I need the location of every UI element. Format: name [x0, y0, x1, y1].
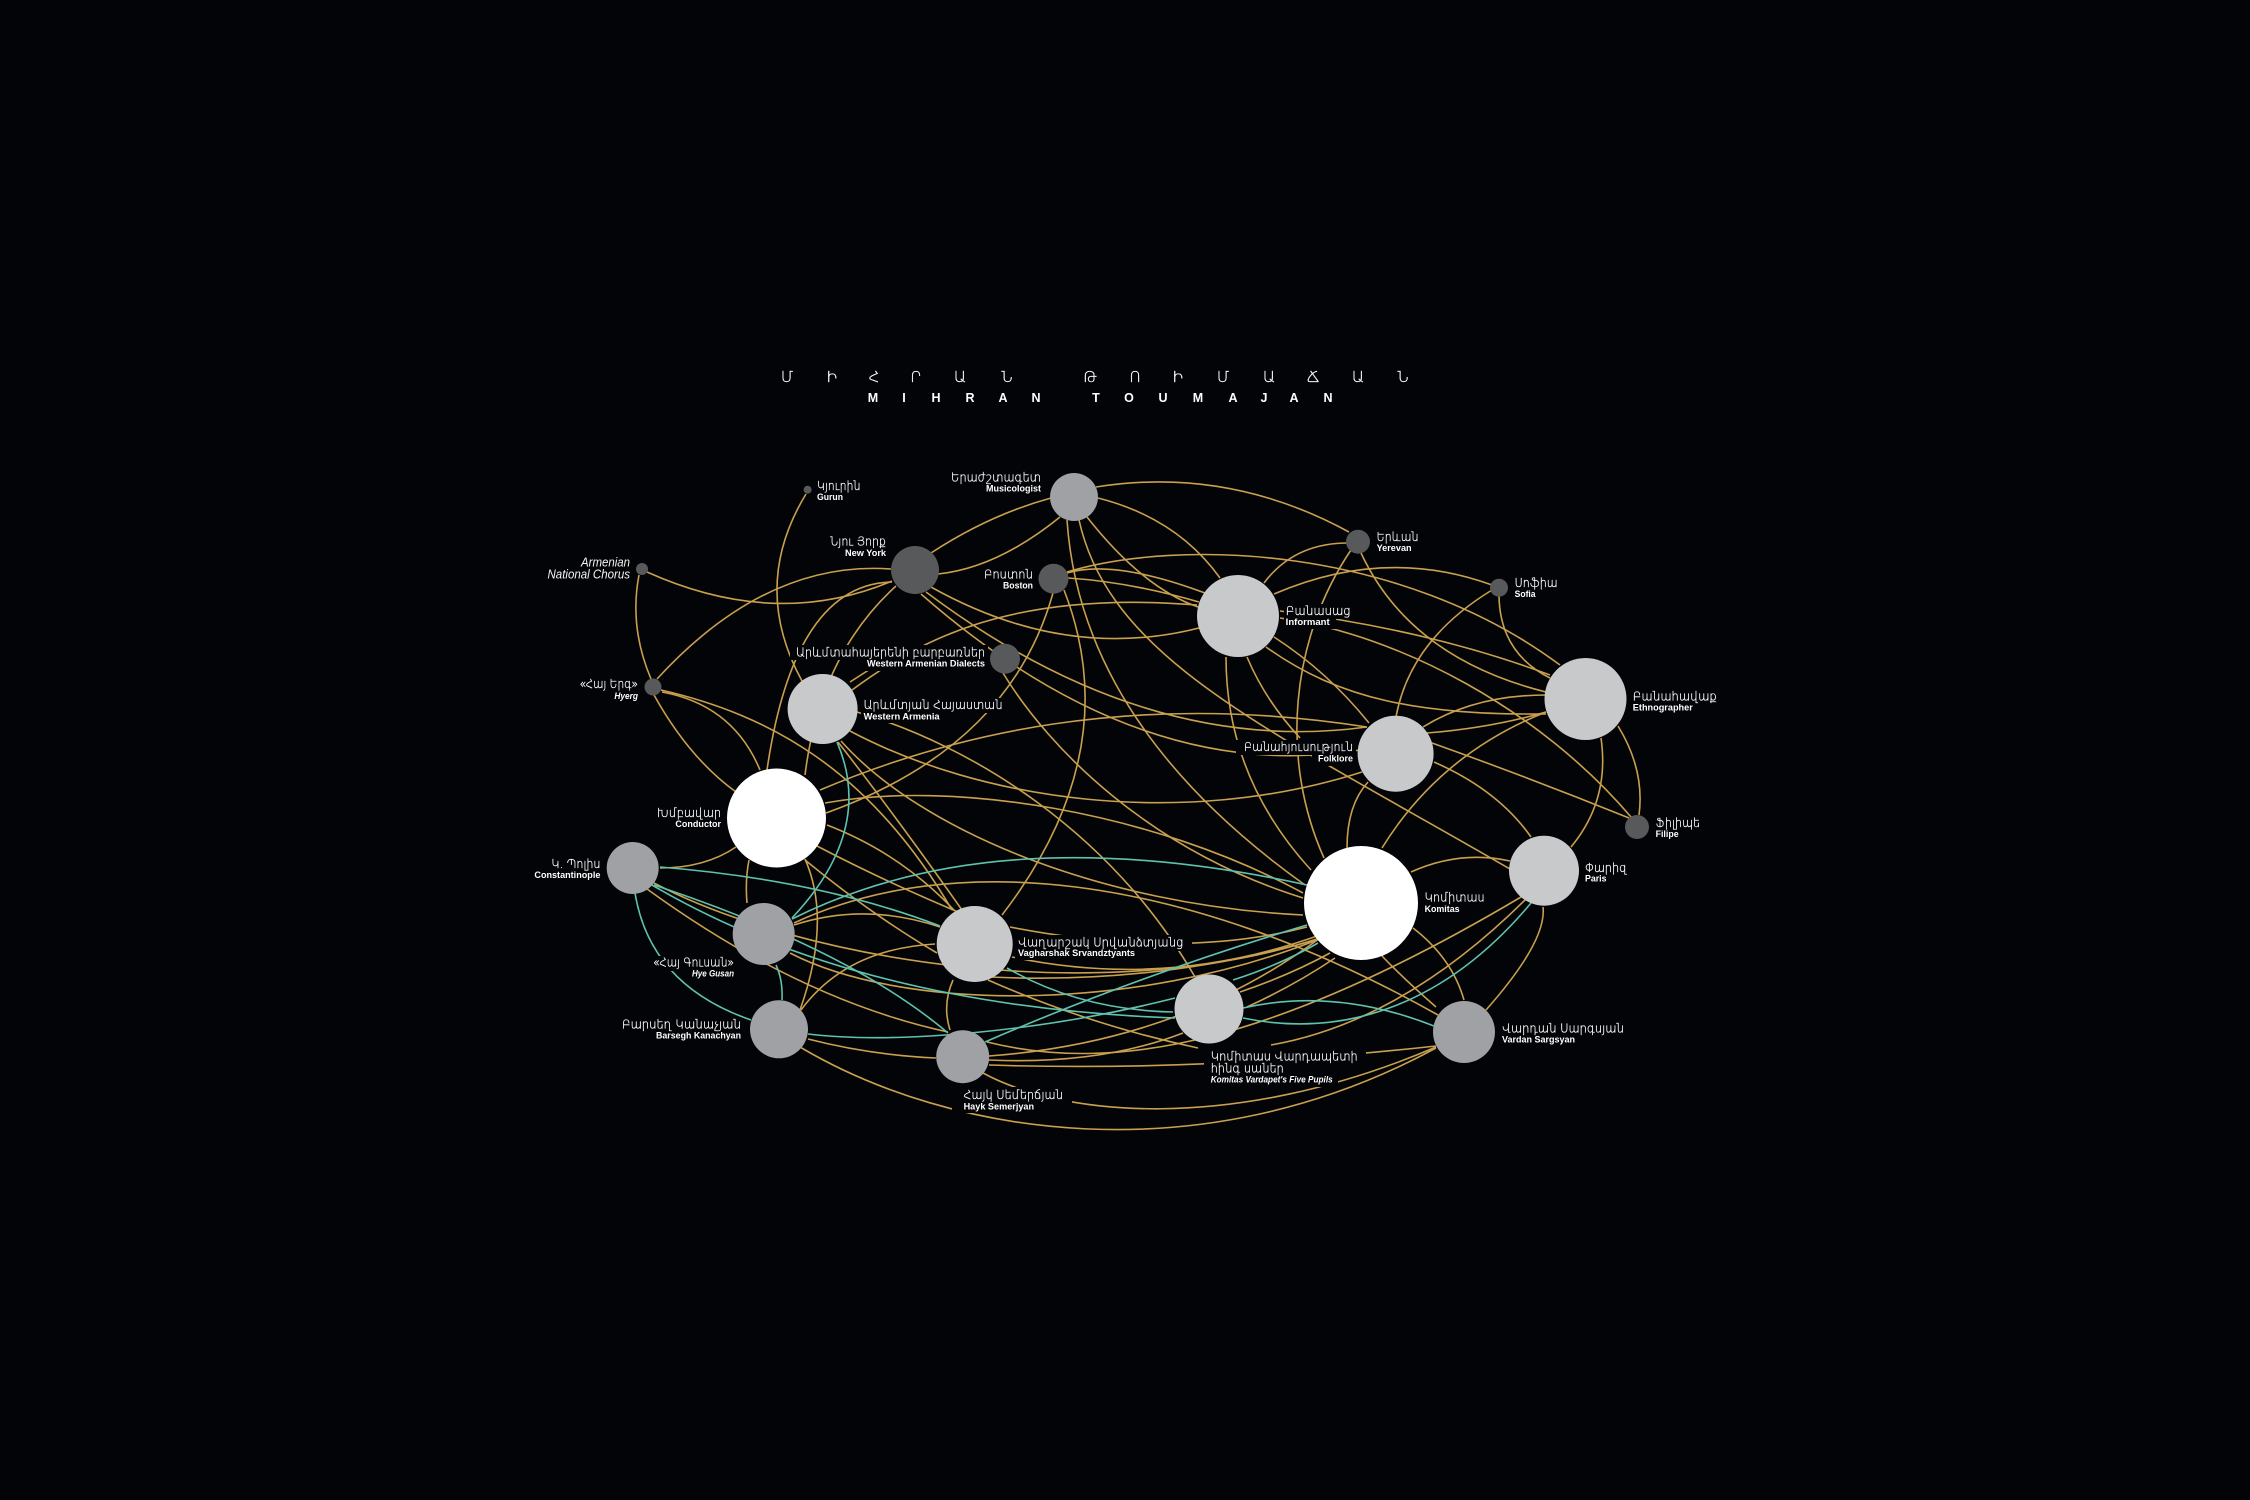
node: Hayk Semerjyan [936, 1030, 989, 1083]
label: Yerevan: Yerevan [1377, 543, 1412, 554]
label: Folklore: Folklore [1318, 754, 1353, 765]
label: Paris: Փարիզ [1585, 860, 1627, 875]
label: Folklore: Բանահյուսություն [1244, 739, 1353, 754]
node: Barsegh Kanachyan [750, 1000, 808, 1058]
label: Vagharshak Srvandztyants: Vagharshak Srvandztyants [1018, 948, 1135, 959]
label: Western Armenian Dialects: Արևմտահայերենի բարբառներ [796, 645, 985, 660]
label: Western Armenia: Արևմտյան Հայաստան [864, 697, 1003, 712]
label: Constantinople [528, 856, 603, 882]
label: Vardan Sargsyan: Վարդան Սարգսյան [1502, 1021, 1624, 1036]
label: Filipe [1653, 815, 1706, 841]
label: Gurun: Կյուրին [817, 478, 860, 493]
node: Informant [1197, 575, 1279, 657]
label: Komitas: Komitas [1425, 904, 1460, 915]
node: Komitas Vardapet's Five Pupils [1174, 974, 1244, 1044]
label: Western Armenian Dialects [790, 645, 988, 671]
label: Komitas Vardapet's Five Pupils: Komitas Vardapet's Five Pupils [1211, 1075, 1333, 1086]
node: Sofia [1490, 579, 1508, 597]
label: Musicologist: Musicologist [986, 484, 1042, 494]
label: Armenian National Chorus [542, 555, 633, 582]
label: Ethnographer: Բանահավաք [1633, 689, 1717, 704]
label: Komitas Vardapet's Five Pupils [1204, 1049, 1366, 1087]
label: Hayk Semerjyan: Hayk Semerjyan [964, 1102, 1034, 1113]
label: Gurun [814, 478, 866, 503]
label: Hyerg [574, 676, 641, 702]
label: Boston: Boston [1003, 581, 1033, 592]
label: Gurun: Gurun [817, 492, 843, 503]
label: New York: Նյու Յորք [830, 534, 886, 549]
label: Barsegh Kanachyan: Բարսեղ Կանաչյան [622, 1017, 741, 1032]
node: Vagharshak Srvandztyants [937, 906, 1013, 982]
label: Musicologist: Երաժշտագետ [951, 470, 1041, 485]
label: Western Armenia: Western Armenia [864, 712, 940, 723]
label: Vagharshak Srvandztyants [1015, 935, 1192, 960]
label: New York: New York [845, 548, 887, 559]
node: Komitas [1304, 846, 1418, 960]
label: Filipe: Filipe [1656, 829, 1679, 840]
label: Informant [1284, 603, 1357, 629]
label: Komitas Vardapet's Five Pupils: Կոմիտաս Վարդապետի [1211, 1049, 1358, 1064]
title: Armenian name: ՄԻՀՐԱՆԹՈԻՄԱՃԱՆ [781, 368, 1409, 386]
node: Hyerg [644, 678, 662, 696]
label: Vardan Sargsyan: Vardan Sargsyan [1502, 1035, 1575, 1046]
node: Filipe [1625, 815, 1649, 839]
label: Yerevan [1374, 529, 1425, 555]
label: Sofia [1512, 575, 1564, 601]
node: New York [891, 546, 939, 594]
node: Western Armenia [788, 674, 858, 744]
network edges: teal links [635, 742, 1531, 1042]
label: Informant: Informant [1286, 617, 1331, 628]
label: Western Armenia [861, 697, 1009, 723]
node: Vardan Sargsyan [1433, 1001, 1495, 1063]
label: Yerevan: Երևան [1377, 529, 1419, 544]
label: Hayk Semerjyan [952, 1087, 1072, 1113]
node: Paris [1509, 836, 1579, 906]
node: Western Armenian Dialects [990, 644, 1020, 674]
label: Filipe: Ֆիլիպե [1656, 815, 1700, 830]
title: Latin name: MIHRANTOUMAJAN [868, 391, 1333, 405]
node: Boston [1038, 564, 1068, 594]
label: Armenian National Chorus: National Chorus [548, 567, 630, 582]
node: Musicologist [1050, 473, 1098, 521]
label: Armenian National Chorus: Armenian [580, 555, 630, 570]
label: Hye Gusan: «Հայ Գուսան» [653, 955, 734, 970]
label: Constantinople: Constantinople [534, 870, 600, 881]
label: Komitas: Կոմիտաս [1425, 890, 1485, 905]
label: Sofia: Սոֆիա [1515, 575, 1558, 590]
node: Folklore [1358, 716, 1434, 792]
label: Komitas [1422, 890, 1491, 916]
node: Ethnographer [1544, 658, 1626, 740]
label: Conductor: Conductor [675, 819, 721, 830]
label: Barsegh Kanachyan [616, 1017, 744, 1043]
node: Hye Gusan [733, 903, 795, 965]
node: Yerevan [1346, 530, 1370, 554]
label: Vardan Sargsyan [1500, 1021, 1631, 1047]
label: Ethnographer [1630, 689, 1723, 715]
label: Boston: Բոստոն [984, 567, 1033, 582]
label: Hye Gusan [647, 955, 737, 981]
label: Boston [978, 567, 1036, 592]
label: Conductor: Խմբավար [657, 805, 721, 820]
node: Conductor [727, 768, 826, 868]
label: Western Armenian Dialects: Western Armenian Dialects [867, 659, 985, 670]
label: Musicologist [945, 470, 1044, 495]
label: Hye Gusan: Hye Gusan [692, 969, 734, 980]
label: Komitas Vardapet's Five Pupils: հինգ սաներ [1211, 1061, 1284, 1076]
label: Hayk Semerjyan: Հայկ Սեմերճյան [964, 1087, 1063, 1102]
label: Ethnographer: Ethnographer [1633, 703, 1693, 714]
label: Barsegh Kanachyan: Barsegh Kanachyan [656, 1031, 741, 1042]
network nodes [607, 473, 1649, 1083]
label: Hyerg: «Հայ Երգ» [580, 676, 638, 691]
node: Armenian National Chorus [636, 563, 648, 575]
label: Paris [1583, 860, 1634, 886]
label: Vagharshak Srvandztyants: Վաղարշակ Սրվանձտյանց [1018, 935, 1183, 950]
label: Paris: Paris [1585, 874, 1606, 885]
title [781, 368, 1409, 405]
node: Constantinople [607, 842, 659, 894]
label: Constantinople: Կ. Պոլիս [551, 856, 600, 871]
network edges: ochre links [636, 482, 1640, 1130]
label: Folklore [1236, 739, 1356, 766]
label: Sofia: Sofia [1515, 589, 1536, 600]
label: Conductor [651, 805, 724, 831]
label: New York [824, 534, 889, 560]
node: Gurun [804, 486, 812, 494]
label: Informant: Բանասաց [1286, 603, 1350, 618]
label: Hyerg: Hyerg [614, 691, 638, 702]
